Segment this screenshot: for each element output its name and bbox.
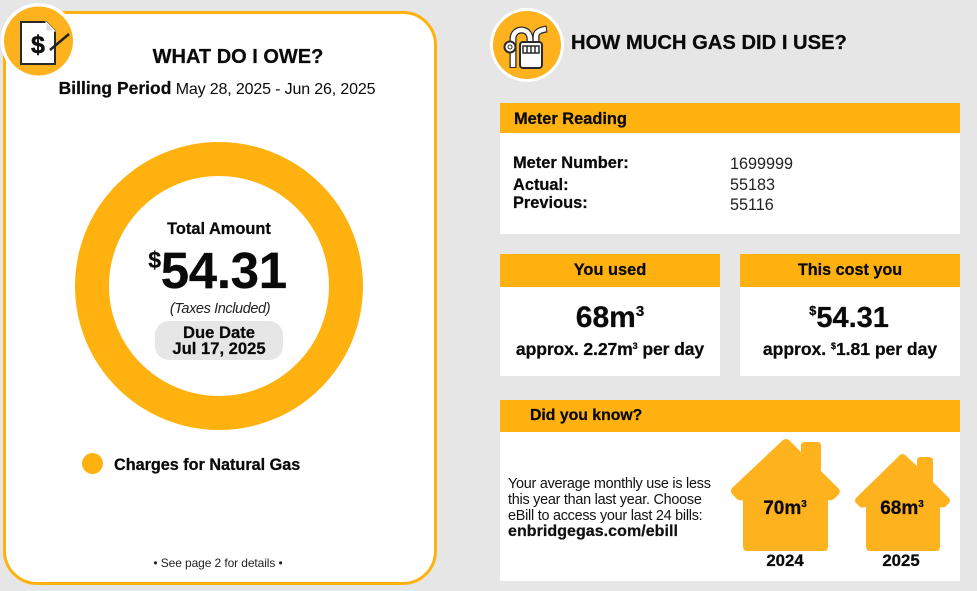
panel: did you know: [500, 400, 960, 581]
total amount value: $54.31: [148, 242, 287, 299]
house 2024 value: 70m3: [763, 498, 807, 519]
did you know text: enbridgegas.com/ebill: [508, 523, 678, 540]
did you know header: Did you know?: [530, 407, 642, 424]
panel: meter reading: [500, 103, 960, 234]
usage value: 68m3: [576, 301, 644, 334]
year 2025: 2025: [882, 551, 920, 570]
due date pill: [155, 321, 283, 360]
you used header: You used: [574, 261, 646, 279]
meter reading header: [500, 103, 960, 133]
legend label: Charges for Natural Gas: [114, 456, 300, 474]
taxes note: (Taxes Included): [170, 301, 270, 317]
meter labels: Meter Number:: [513, 154, 629, 172]
house 2025: [855, 454, 950, 551]
meter labels: Previous:: [513, 194, 588, 212]
meter labels: [513, 154, 629, 212]
year 2024: 2024: [766, 551, 804, 570]
you used header: [500, 254, 720, 287]
meter values: [730, 155, 793, 214]
legend dot: [82, 453, 103, 474]
cost per day: approx. $1.81 per day: [763, 339, 937, 359]
cost value: $54.31: [809, 302, 889, 334]
due date pill: Jul 17, 2025: [172, 339, 266, 358]
panel: you used: [500, 254, 720, 376]
did you know text: [508, 476, 711, 540]
total amount label: Total Amount: [167, 220, 271, 238]
panel: what do I owe: [3, 11, 437, 585]
panel: this cost you: [740, 254, 960, 376]
meter labels: Actual:: [513, 176, 569, 194]
donut chart: charges: [75, 142, 363, 430]
icon: gas meter: [490, 8, 564, 82]
icon: bill with dollar sign: $: [31, 31, 45, 59]
did you know text: eBill to access your last 24 bills:: [508, 508, 702, 524]
did you know text: Your average monthly use is less: [508, 476, 711, 492]
meter values: 1699999: [730, 155, 793, 173]
usage per day: approx. 2.27m3 per day: [516, 339, 704, 359]
cost header: This cost you: [798, 261, 902, 279]
due date pill: Due Date: [183, 323, 255, 342]
house 2024: [731, 439, 840, 551]
meter values: 55116: [730, 196, 774, 214]
meter values: 55183: [730, 176, 775, 194]
heading: how much gas: HOW MUCH GAS DID I USE?: [571, 32, 847, 54]
cost header: [740, 254, 960, 287]
icon: bill with dollar sign: [0, 3, 73, 76]
did you know text: this year than last year. Choose: [508, 492, 702, 508]
billing period: Billing Period May 28, 2025 - Jun 26, 2025: [59, 78, 375, 98]
heading: what do I owe: WHAT DO I OWE?: [153, 46, 323, 68]
did you know header: [500, 400, 960, 432]
meter reading header: Meter Reading: [514, 110, 627, 128]
house 2025 value: 68m3: [880, 498, 924, 519]
footnote: • See page 2 for details •: [153, 556, 283, 570]
